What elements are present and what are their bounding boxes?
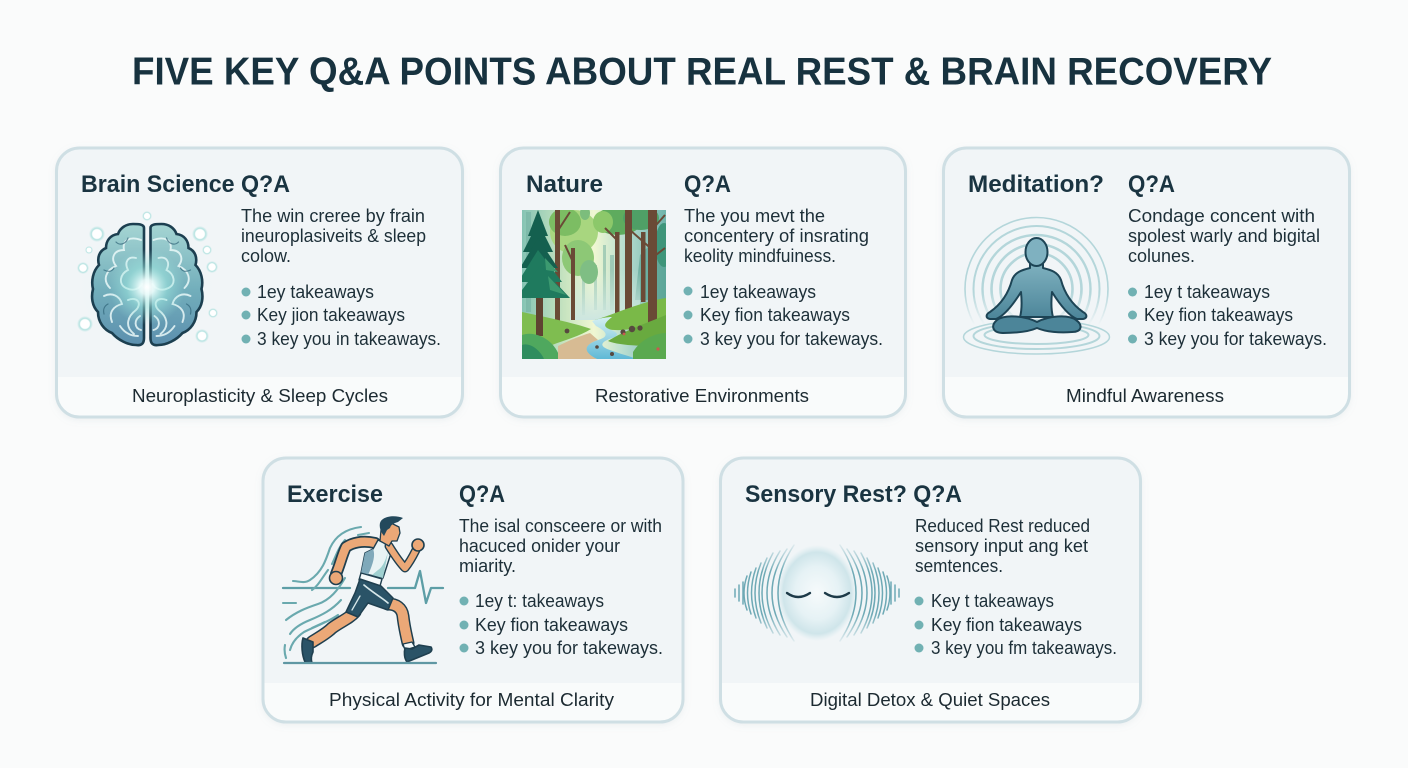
- question answer text: [915, 516, 1090, 576]
- takeaways list: [1128, 282, 1327, 349]
- footer label: Mindful Awareness: [1066, 385, 1224, 406]
- panel: meditation: [944, 148, 1350, 417]
- question answer text: hacuced onider your: [459, 536, 620, 556]
- question answer text: concentery of insrating: [684, 226, 869, 246]
- takeaways list: [684, 282, 883, 349]
- heading: Q?A: [459, 481, 505, 508]
- heading: Meditation?: [968, 171, 1104, 198]
- question answer text: [1128, 206, 1320, 266]
- panel: nature: [500, 148, 906, 417]
- question answer text: [684, 206, 869, 266]
- question answer text: Condage concent with: [1128, 206, 1315, 226]
- takeaways list: [914, 591, 1117, 658]
- takeaways list: 3 key you for takeways.: [1144, 329, 1327, 349]
- heading: Exercise: [287, 481, 383, 508]
- takeaways list: Key fion takeaways: [700, 305, 850, 325]
- question answer text: keolity mindfuiness.: [684, 246, 836, 266]
- question answer text: sensory input ang ket: [915, 536, 1088, 556]
- title: FIVE KEY Q&A POINTS ABOUT REAL REST & BRAIN RECOVERY: [132, 50, 1272, 94]
- takeaways list: Key fion takeaways: [931, 615, 1082, 635]
- question answer text: The isal consceere or with: [459, 516, 662, 536]
- takeaways list: Key jion takeaways: [257, 305, 405, 325]
- question answer text: The you mevt the: [684, 206, 825, 226]
- question answer text: colow.: [241, 246, 291, 266]
- heading: Nature: [526, 171, 603, 198]
- question answer text: colunes.: [1128, 246, 1195, 266]
- takeaways list: Key fion takeaways: [1144, 305, 1293, 325]
- panel: sensory rest: [720, 458, 1140, 722]
- heading: Sensory Rest? Q?A: [745, 481, 962, 508]
- panel: brain science: [56, 148, 462, 417]
- panel: exercise: [263, 458, 683, 722]
- heading: Brain Science Q?A: [81, 171, 290, 198]
- question answer text: ineuroplasiveits & sleep: [241, 226, 426, 246]
- illustration: forest stream: [522, 210, 666, 359]
- icon: runner with pulse line: [283, 516, 443, 663]
- takeaways list: Key fion takeaways: [475, 615, 628, 635]
- takeaways list: 1ey takeaways: [700, 282, 816, 302]
- takeaways list: 3 key you in takeaways.: [257, 329, 441, 349]
- heading: [968, 171, 1175, 198]
- heading: [287, 481, 505, 508]
- takeaways list: 3 key you fm takeaways.: [931, 638, 1117, 658]
- takeaways list: 3 key you for takeways.: [700, 329, 883, 349]
- icon: glowing brain: [77, 211, 218, 354]
- question answer text: [459, 516, 662, 576]
- takeaways list: Key t takeaways: [931, 591, 1054, 611]
- question answer text: [241, 206, 426, 266]
- takeaways list: 1ey t: takeaways: [475, 591, 604, 611]
- takeaways list: 3 key you for takeways.: [475, 638, 663, 658]
- question answer text: Reduced Rest reduced: [915, 516, 1090, 536]
- heading: Q?A: [684, 171, 731, 198]
- question answer text: semtences.: [915, 556, 1003, 576]
- footer label: Restorative Environments: [595, 385, 809, 406]
- icon: closed eyes and sound waves: [735, 545, 899, 641]
- footer label: Neuroplasticity & Sleep Cycles: [132, 385, 388, 406]
- heading: Q?A: [1128, 171, 1175, 198]
- question answer text: miarity.: [459, 556, 516, 576]
- takeaways list: 1ey takeaways: [257, 282, 374, 302]
- question answer text: spolest warly and bigital: [1128, 226, 1320, 246]
- takeaways list: 1ey t takeaways: [1144, 282, 1270, 302]
- icon: meditating figure: [964, 218, 1110, 360]
- takeaways list: [460, 591, 663, 658]
- heading: [526, 171, 731, 198]
- question answer text: The win creree by frain: [241, 206, 425, 226]
- takeaways list: [242, 282, 441, 349]
- footer label: Physical Activity for Mental Clarity: [329, 689, 615, 710]
- footer label: Digital Detox & Quiet Spaces: [810, 689, 1050, 710]
